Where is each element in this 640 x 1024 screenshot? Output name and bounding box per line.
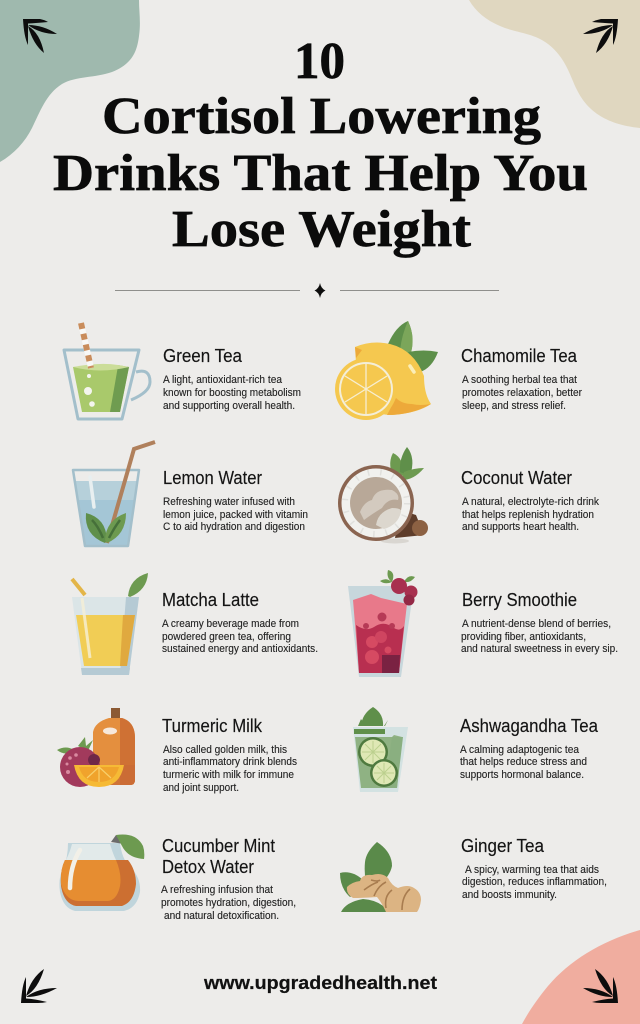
description — [163, 374, 301, 412]
heading: Turmeric Milk — [162, 716, 263, 736]
icon: leaf sprig top-left — [23, 19, 57, 53]
heading: Ashwagandha Tea — [460, 716, 599, 736]
item: Ashwagandha Tea — [353, 707, 599, 792]
item: Turmeric Milk — [57, 708, 297, 794]
title: Lose Weight — [172, 201, 472, 258]
blob: beige top-right corner — [469, 0, 640, 128]
description — [162, 618, 318, 655]
icon: leaf sprig top-right — [583, 19, 618, 53]
description — [461, 618, 618, 655]
description: A calming adaptogenic tea — [460, 744, 579, 756]
description: Also called golden milk, this — [163, 744, 287, 756]
item: Coconut Water — [338, 447, 600, 544]
description: sustained energy and antioxidants. — [162, 643, 318, 655]
description: anti-inflammatory drink blends — [163, 756, 297, 768]
icon: turmeric bottle with berry and orange slice — [57, 708, 135, 787]
item: Ginger Tea — [340, 836, 607, 912]
footer website: www.upgradedhealth.net — [203, 973, 437, 993]
description: and supports heart health. — [462, 521, 579, 533]
description: A creamy beverage made from — [162, 618, 299, 630]
description: C to aid hydration and digestion — [163, 521, 305, 533]
heading: Green Tea — [163, 346, 243, 366]
description — [462, 496, 600, 533]
item: Chamomile Tea — [335, 321, 582, 420]
icon: berry smoothie glass — [348, 570, 418, 677]
description: A spicy, warming tea that aids — [465, 864, 599, 876]
icon: leaf sprig bottom-right — [583, 969, 618, 1003]
heading: Matcha Latte — [162, 590, 259, 610]
description: promotes hydration, digestion, — [161, 897, 296, 909]
description — [163, 744, 297, 794]
item: Berry Smoothie — [348, 570, 618, 677]
description: lemon juice, packed with vitamin — [163, 509, 308, 521]
description: sleep, and stress relief. — [462, 400, 566, 412]
description: and natural detoxification. — [164, 910, 279, 922]
heading: Cucumber Mint — [162, 836, 275, 856]
heading: Chamomile Tea — [461, 346, 578, 366]
description — [462, 864, 607, 901]
description: A nutrient-dense blend of berries, — [462, 618, 611, 630]
item: Green Tea — [64, 323, 301, 419]
icon: cucumber infused glass — [353, 707, 408, 792]
heading: Berry Smoothie — [462, 590, 577, 610]
description: and supporting overall health. — [163, 400, 295, 412]
description: powdered green tea, offering — [162, 631, 291, 643]
heading: Detox Water — [162, 857, 254, 877]
description — [163, 496, 308, 533]
icon: green tea cup — [64, 323, 150, 419]
description: supports hormonal balance. — [460, 769, 584, 781]
icon: water glass with straw and leaves — [73, 442, 155, 546]
description — [161, 884, 296, 922]
heading: Ginger Tea — [461, 836, 545, 856]
icon: rounded jar with orange drink — [59, 834, 144, 911]
description: A soothing herbal tea that — [462, 374, 577, 386]
item: Matcha Latte — [72, 573, 318, 675]
description: providing fiber, antioxidants, — [461, 631, 586, 643]
icon: leaf sprig bottom-left — [21, 969, 57, 1003]
title — [53, 33, 588, 258]
description: and boosts immunity. — [462, 889, 557, 901]
icon: halved coconut — [338, 447, 428, 544]
description: and natural sweetness in every sip. — [461, 643, 618, 655]
heading: Lemon Water — [163, 468, 262, 488]
description: Refreshing water infused with — [163, 496, 295, 508]
description: known for boosting metabolism — [163, 387, 301, 399]
description: A natural, electrolyte-rich drink — [462, 496, 600, 508]
title: 10 — [294, 33, 345, 90]
description: and joint support. — [163, 782, 239, 794]
heading: Coconut Water — [461, 468, 572, 488]
divider with diamond — [115, 283, 499, 298]
icon: ginger root with leaves — [340, 842, 421, 912]
description — [460, 744, 587, 781]
icon: lemon with slice and leaves — [335, 321, 438, 420]
description — [462, 374, 582, 412]
description: turmeric with milk for immune — [163, 769, 294, 781]
blob: pink bottom-right corner — [522, 930, 640, 1024]
description: promotes relaxation, better — [462, 387, 582, 399]
heading — [162, 836, 275, 877]
description: that helps replenish hydration — [462, 509, 594, 521]
description: that helps reduce stress and — [460, 756, 587, 768]
description: A light, antioxidant-rich tea — [163, 374, 282, 386]
icon: yellow latte glass — [72, 573, 148, 675]
item: Cucumber Mint Detox Water — [59, 834, 296, 922]
title: Cortisol Lowering — [102, 88, 541, 145]
title: Drinks That Help You — [53, 145, 588, 202]
description: digestion, reduces inflammation, — [462, 876, 607, 888]
item: Lemon Water — [73, 442, 308, 546]
description: A refreshing infusion that — [161, 884, 273, 896]
blob: green top-left corner — [0, 0, 140, 162]
